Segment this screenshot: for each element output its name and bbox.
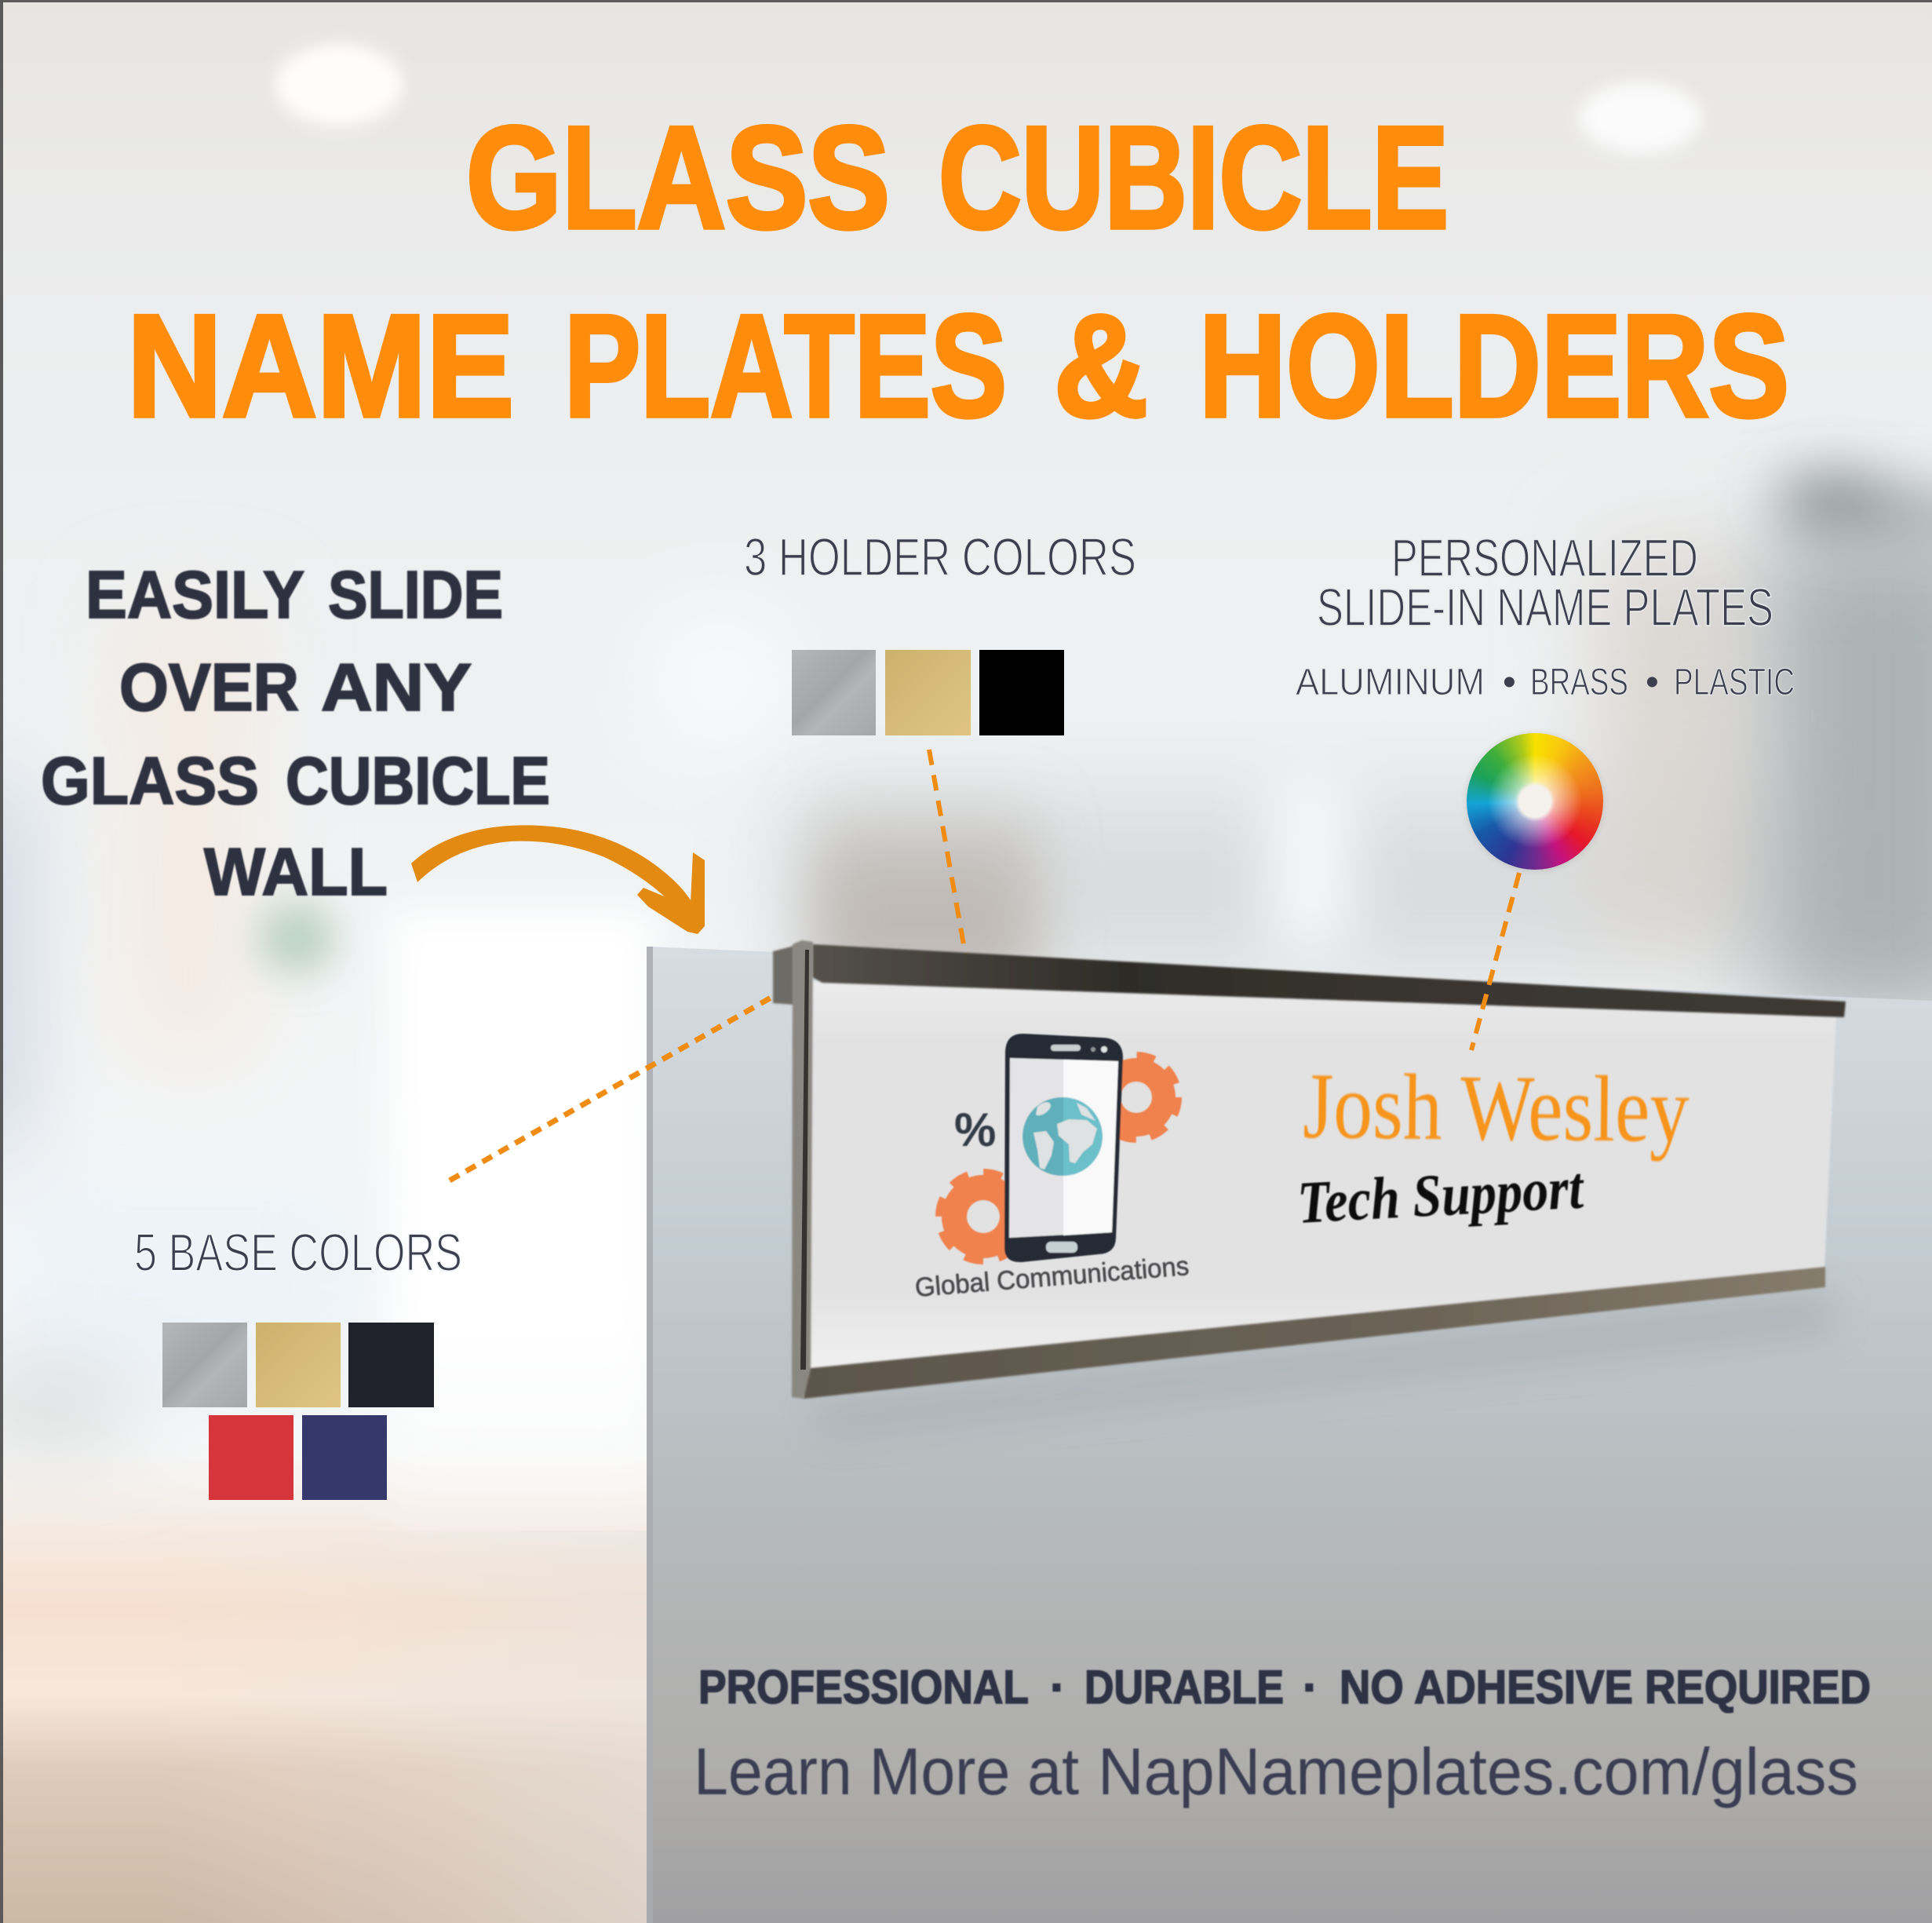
tagline: NO ADHESIVE REQUIRED	[1340, 1661, 1871, 1713]
icon: globe	[1023, 1097, 1103, 1176]
callout: easily slide over any glass cubicle wall: SLIDE	[328, 558, 503, 633]
tagline: ·	[1303, 1661, 1318, 1713]
title: &	[1054, 286, 1148, 447]
callout: easily slide over any glass cubicle wall: WALL	[204, 835, 388, 910]
name plate holder	[773, 940, 1846, 1436]
label: 3 holder colors	[744, 527, 1136, 735]
base swatch: black	[348, 1323, 434, 1407]
label: personalized slide-in name plates: PERSONALIZED	[1391, 528, 1698, 588]
holder swatch: aluminum	[792, 650, 876, 735]
base swatch: brass	[256, 1323, 341, 1407]
label: personalized slide-in name plates: •	[1503, 662, 1516, 703]
logo caption: Global Communications	[914, 1251, 1190, 1303]
label: personalized slide-in name plates: ALUMINUM	[1296, 662, 1485, 703]
base swatch: red	[209, 1415, 293, 1500]
bottom rail	[804, 1267, 1825, 1399]
slide-in plate	[808, 981, 1836, 1370]
title: HOLDERS	[1199, 286, 1789, 447]
icon: lower gear	[942, 1175, 1025, 1258]
label: personalized slide-in name plates: SLIDE-IN NAME PLATES	[1317, 578, 1773, 637]
icon: colour wheel	[1467, 733, 1603, 870]
label: personalized slide-in name plates: •	[1646, 662, 1659, 703]
tagline	[698, 1661, 1871, 1713]
title: NAME	[127, 286, 514, 447]
tagline: ·	[1050, 1661, 1066, 1713]
title: PLATES	[564, 286, 1007, 447]
connector: holder swatch to rail	[929, 750, 967, 962]
clamp block behind glass edge	[773, 946, 794, 1005]
label: 5 base colors	[134, 1223, 462, 1500]
website link: NapNameplates.com/glass	[1098, 1735, 1858, 1808]
label: 3 holder colors: 3 HOLDER COLORS	[744, 527, 1136, 587]
connector: base label to holder base	[450, 996, 774, 1180]
base swatch: aluminum	[162, 1323, 247, 1407]
icon: phone	[1004, 1034, 1123, 1262]
tagline: PROFESSIONAL	[698, 1661, 1029, 1713]
callout: easily slide over any glass cubicle wall	[41, 558, 550, 910]
base swatch: navy	[302, 1415, 387, 1500]
callout: easily slide over any glass cubicle wall: OVER	[119, 651, 299, 725]
tagline: DURABLE	[1084, 1661, 1284, 1713]
icon: percent sign: %	[954, 1104, 996, 1156]
label: personalized slide-in name plates: BRASS	[1530, 662, 1628, 703]
title: CUBICLE	[939, 97, 1449, 259]
icon: upper gear	[1097, 1058, 1176, 1137]
holder swatch: brass	[885, 650, 971, 735]
label: personalized slide-in name plates	[1296, 528, 1795, 703]
label: personalized slide-in name plates: PLASTIC	[1674, 662, 1795, 703]
holder swatch: black	[979, 650, 1064, 735]
title	[127, 97, 1789, 447]
website link: Learn More at	[694, 1735, 1079, 1808]
callout: easily slide over any glass cubicle wall: CUBICLE	[286, 744, 550, 819]
website link	[694, 1735, 1858, 1808]
logo: phone with gears and globe	[914, 1034, 1190, 1303]
connector: colour wheel to plate	[1471, 873, 1519, 1050]
plate title: Tech Support: Tech Support	[1296, 1155, 1587, 1236]
plate name: Josh Wesley: Josh Wesley	[1303, 1054, 1690, 1162]
left end bar	[792, 940, 813, 1399]
label: 5 base colors: 5 BASE COLORS	[134, 1223, 462, 1283]
top rail	[812, 944, 1846, 1017]
callout: easily slide over any glass cubicle wall: ANY	[321, 651, 472, 725]
title: GLASS	[466, 97, 890, 259]
arrow: brush curve to wall	[411, 825, 705, 934]
callout: easily slide over any glass cubicle wall: GLASS	[41, 744, 259, 819]
callout: easily slide over any glass cubicle wall: EASILY	[86, 558, 304, 633]
glass cubicle wall panel	[647, 947, 1932, 1923]
